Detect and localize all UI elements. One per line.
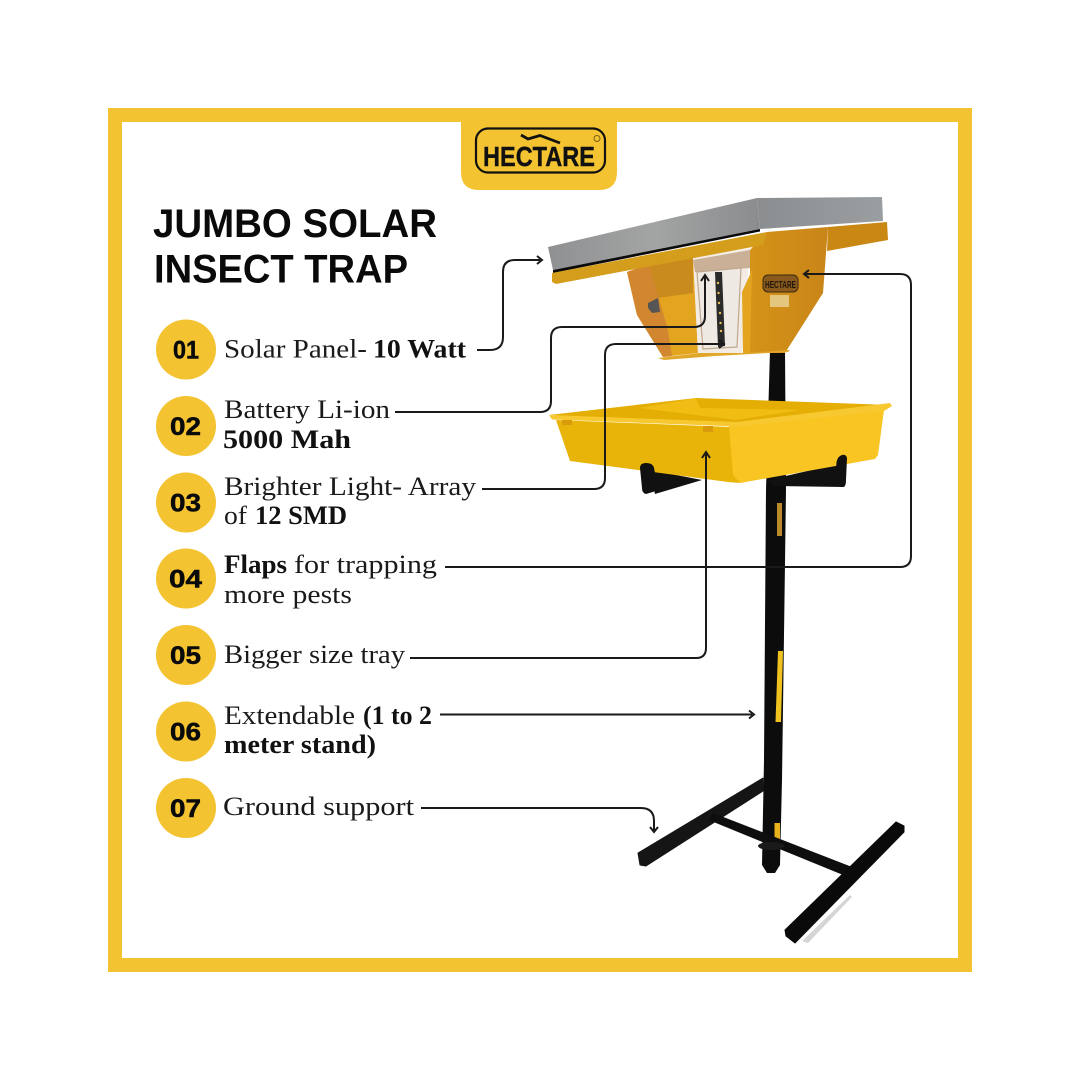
bolt	[648, 298, 660, 313]
title	[153, 202, 437, 292]
item 02: 02	[170, 413, 201, 441]
item 04: more pests	[224, 580, 352, 609]
yellow frame	[115, 115, 965, 965]
item 04: 04	[169, 566, 202, 594]
arrow 4: flaps	[445, 270, 911, 567]
item 06: meter stand)	[224, 730, 376, 759]
item 02: Battery Li-ion	[224, 395, 390, 424]
item 06: (1 to 2	[363, 701, 432, 730]
item 07	[156, 778, 415, 838]
base plate	[658, 350, 790, 360]
panel yellow rail	[552, 232, 767, 284]
window with LED strip	[693, 248, 750, 354]
item 02	[156, 395, 390, 456]
arrow 2: battery	[395, 275, 709, 412]
item 04	[156, 548, 437, 609]
item 05: Bigger size tray	[224, 640, 405, 669]
housing right flap: HECTARE	[765, 280, 796, 291]
logo tab	[461, 122, 617, 190]
item 01	[156, 320, 466, 380]
item 06: 06	[170, 718, 201, 746]
item 03: Brighter Light- Array	[224, 472, 476, 501]
arrow 1: solar panel	[477, 256, 542, 350]
item 03	[156, 472, 476, 532]
item 01: 01	[173, 336, 199, 364]
title: INSECT TRAP	[154, 248, 408, 292]
tray bracket uprights	[640, 455, 847, 494]
ground support base	[638, 778, 904, 943]
solar panel	[548, 197, 883, 273]
item 01: 10 Watt	[373, 334, 466, 364]
item 03: 12 SMD	[255, 501, 347, 530]
arrow 3: light array	[482, 340, 724, 489]
item 01: Solar Panel-	[224, 334, 367, 364]
housing left flap	[627, 256, 698, 357]
item 05: 05	[170, 642, 201, 670]
housing left side panel	[627, 264, 672, 357]
item 07: 07	[170, 795, 201, 823]
logo: Hectare: HECTARE	[483, 141, 595, 172]
product: solar insect trap	[548, 197, 904, 943]
arrow 5: tray	[410, 452, 710, 658]
arrow 7: ground support	[421, 808, 658, 832]
item 03: of	[224, 501, 247, 530]
tray bracket arms	[650, 464, 844, 494]
stand pole	[762, 350, 786, 873]
item 04: Flaps	[224, 550, 287, 579]
item 04: for trapping	[294, 550, 437, 579]
housing upper shade	[649, 256, 693, 298]
item 06	[156, 701, 432, 762]
arrow 6: stand	[440, 710, 754, 718]
mount wing right	[827, 222, 888, 251]
item 03: 03	[170, 490, 201, 518]
housing right flap	[742, 227, 828, 353]
tray	[549, 398, 892, 483]
item 02: 5000 Mah	[223, 425, 352, 454]
title: JUMBO SOLAR	[153, 202, 437, 246]
item 07: Ground support	[223, 792, 415, 821]
item 05	[156, 625, 405, 685]
item 06: Extendable	[224, 701, 355, 730]
logo: Hectare	[476, 128, 605, 172]
